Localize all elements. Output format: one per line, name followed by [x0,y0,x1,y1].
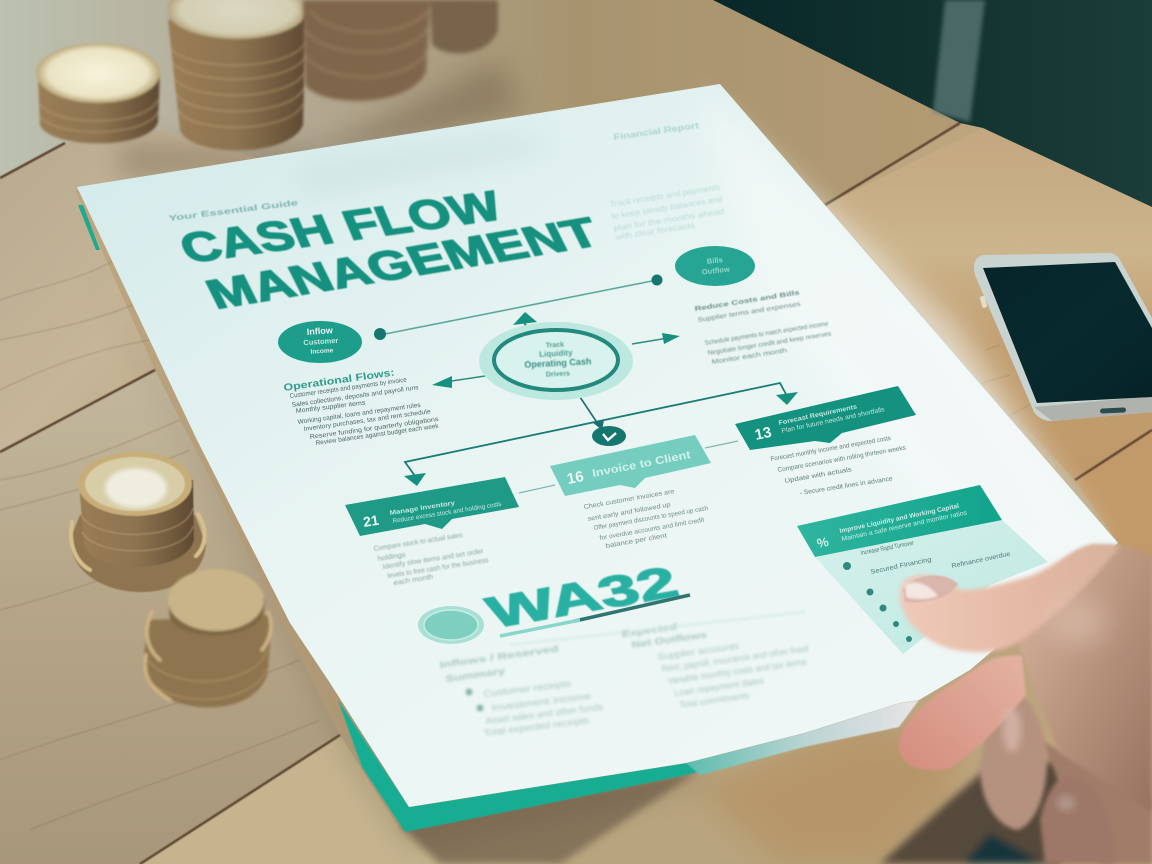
text block: upper right notes: Monitor each month [711,347,788,366]
text block: operational flows: Review balances against budget each week [315,423,440,447]
step box: 21: Reduce excess stock and holding costs [392,501,503,525]
text under step 16 [583,488,709,550]
central hub circle: Drivers [546,370,570,379]
shadow under the sheet [90,260,720,850]
third finger nail [1003,708,1021,752]
title: CASH FLOW [173,183,510,272]
text under step 16: Check customer invoices are [583,488,675,511]
step box: 13: Forecast Requirements [778,403,858,427]
text under step 16: for overdue accounts and limit credit [599,517,705,542]
header labels [168,121,700,223]
coin stack: top left tall [167,0,307,150]
sheet stack edges with teal cover [78,205,919,832]
text block: operational flows: Operational Flows: [283,367,395,394]
blurred lower text columns: Investment income [491,691,591,713]
panel: checklist with teal header: % [816,534,830,551]
text block: upper right notes: Supplier terms and expenses [697,301,802,324]
text under step 16: sent early and followed up [587,501,671,523]
fourth finger highlight [1057,795,1075,811]
step box: 21: Manage Inventory [389,500,456,517]
text block: operational flows: Customer receipts and payments by invoice [289,377,407,400]
central hub circle: Operating Cash [524,356,592,370]
text under step 21: holdings [377,552,406,563]
text under step 13: Compare scenarios with rolling thirteen weeks [777,444,907,474]
step box: 13: Plan for future needs and shortfalls [781,406,886,435]
node: left inflow badge: Customer [303,336,339,347]
thumb [900,545,1120,652]
text under step 21: Compare stock to actual sales [373,532,464,553]
blurred lower text columns: Rent, payroll, insurance and other fixed [661,643,809,674]
step box: 16: Invoice to Client [591,449,692,480]
step box: 21: 21 [362,512,380,530]
node: left inflow badge: Inflow [306,325,334,337]
faint intro text, top right of sheet: Track receipts and payments [609,183,721,209]
node: left inflow badge [278,321,386,363]
hand holding the sheet [880,545,1152,864]
blurred lower text columns: Summary [445,666,506,684]
blurred lower text columns: Inflows / Reserved [439,643,559,670]
node: right outflow badge [652,246,755,286]
palm [1018,545,1152,812]
step box: 21 [345,477,519,536]
blurred lower text columns: Supplier accounts [657,641,740,662]
blurred lower text columns: Loan repayment dates [674,675,765,698]
central hub circle: Track [546,342,564,349]
faint intro text, top right of sheet: with clear forecasts [614,221,695,242]
step box: 13 [735,386,916,450]
coin stacks: blurred rear [303,0,498,101]
text block: upper right notes [694,289,833,366]
text under step 21: levels to free cash for the business [387,557,490,580]
text under step 13 [770,435,907,497]
faint intro text, top right of sheet: to keep steady balances and [611,195,723,221]
WA32 stat with seal [418,558,690,644]
text block: operational flows [283,367,440,447]
step box: 16: 16 [566,468,585,488]
text block: operational flows: Monthly supplier items [295,399,367,415]
central hub circle [479,322,633,400]
coin stack: top left small [36,43,160,143]
soft shadow of coins on table [120,60,520,175]
central hub circle: Liquidity [539,348,573,359]
text block: operational flows: Working capital, loans and repayment rules [297,402,422,426]
header labels: Financial Report [613,121,700,142]
text under step 16: balance per client [605,532,668,550]
blurred lower text columns: Customer receipts [483,678,572,699]
coin stack: left middle [70,452,206,592]
check mark badge [592,426,626,446]
third finger [980,695,1047,830]
text under step 13: Update with actuals [784,466,853,485]
nail tip highlight [905,582,938,599]
panel: checklist with teal header: Secured Financing [870,556,932,576]
blurred lower text columns: Asset sales and other funds [485,702,604,726]
blurred lower text columns: Total expected receipts [483,715,590,738]
blurred lower text columns: Net Outflows [631,630,708,650]
panel: checklist with teal header: Maintain a safe reserve and monitor ratios [841,509,968,543]
knuckle highlight [1048,600,1108,644]
coin stack: left front [143,569,272,707]
lower palm and wrist [1040,740,1152,864]
text block: upper right notes: Schedule payments to match expected income [704,320,829,347]
step box: 13: 13 [753,424,773,444]
main paper sheet [77,84,1118,807]
text block: upper right notes: Negotiate longer credit and keep reserves [707,330,833,357]
text under step 13: Forecast monthly income and expected costs [770,435,892,463]
step box: 16 [550,435,711,496]
faint intro text, top right of sheet [609,183,725,242]
fourth finger [1040,777,1115,864]
text under step 16: Offer payment discounts to speed up cash [593,505,709,532]
text block: operational flows: Reserve funding for quarterly obligations [309,416,440,441]
title: MANAGEMENT [199,210,607,318]
text block: operational flows: Sales collections, deposits and payroll runs [291,384,420,409]
blurred lower text columns: Total commitments [679,690,750,710]
text block: operational flows: Inventory purchases, tax and rent schedule [303,408,431,433]
title [173,183,607,318]
WA32 stat with seal: WA32 [481,558,685,637]
panel: checklist with teal header: Increase Rapid Turnover [860,540,915,557]
flow lines [385,281,787,493]
blurred lower text columns: Expected [621,621,678,639]
text under step 21: Identify slow items and set order [382,548,485,571]
node: right outflow badge: Bills [706,255,723,266]
panel: checklist with teal header: Improve Liquidity and Working Capital [839,503,960,535]
panel: checklist with teal header: Refinance overdue [951,551,1012,570]
blurred lower text columns [439,612,809,738]
text block: upper right notes: Reduce Costs and Bills [694,289,801,313]
faint intro text, top right of sheet: plan for the months ahead [613,207,725,233]
text under step 13: - Secure credit lines in advance [799,475,894,497]
dark room background, top right [713,0,1152,207]
arrowheads [404,312,798,486]
text under step 21 [373,532,490,587]
node: left inflow badge: Income [310,347,334,356]
text under step 21: each month [393,574,434,587]
thumbnail [903,575,958,602]
phone [974,253,1152,421]
shadowed gap and table corner under the fingers [880,760,1060,864]
panel: checklist with teal header [797,485,1048,654]
header labels: Your Essential Guide [168,198,299,223]
node: right outflow badge: Outflow [701,265,730,276]
index finger [899,656,1026,770]
blurred lower text columns: Variable monthly costs and tax items [667,657,807,686]
